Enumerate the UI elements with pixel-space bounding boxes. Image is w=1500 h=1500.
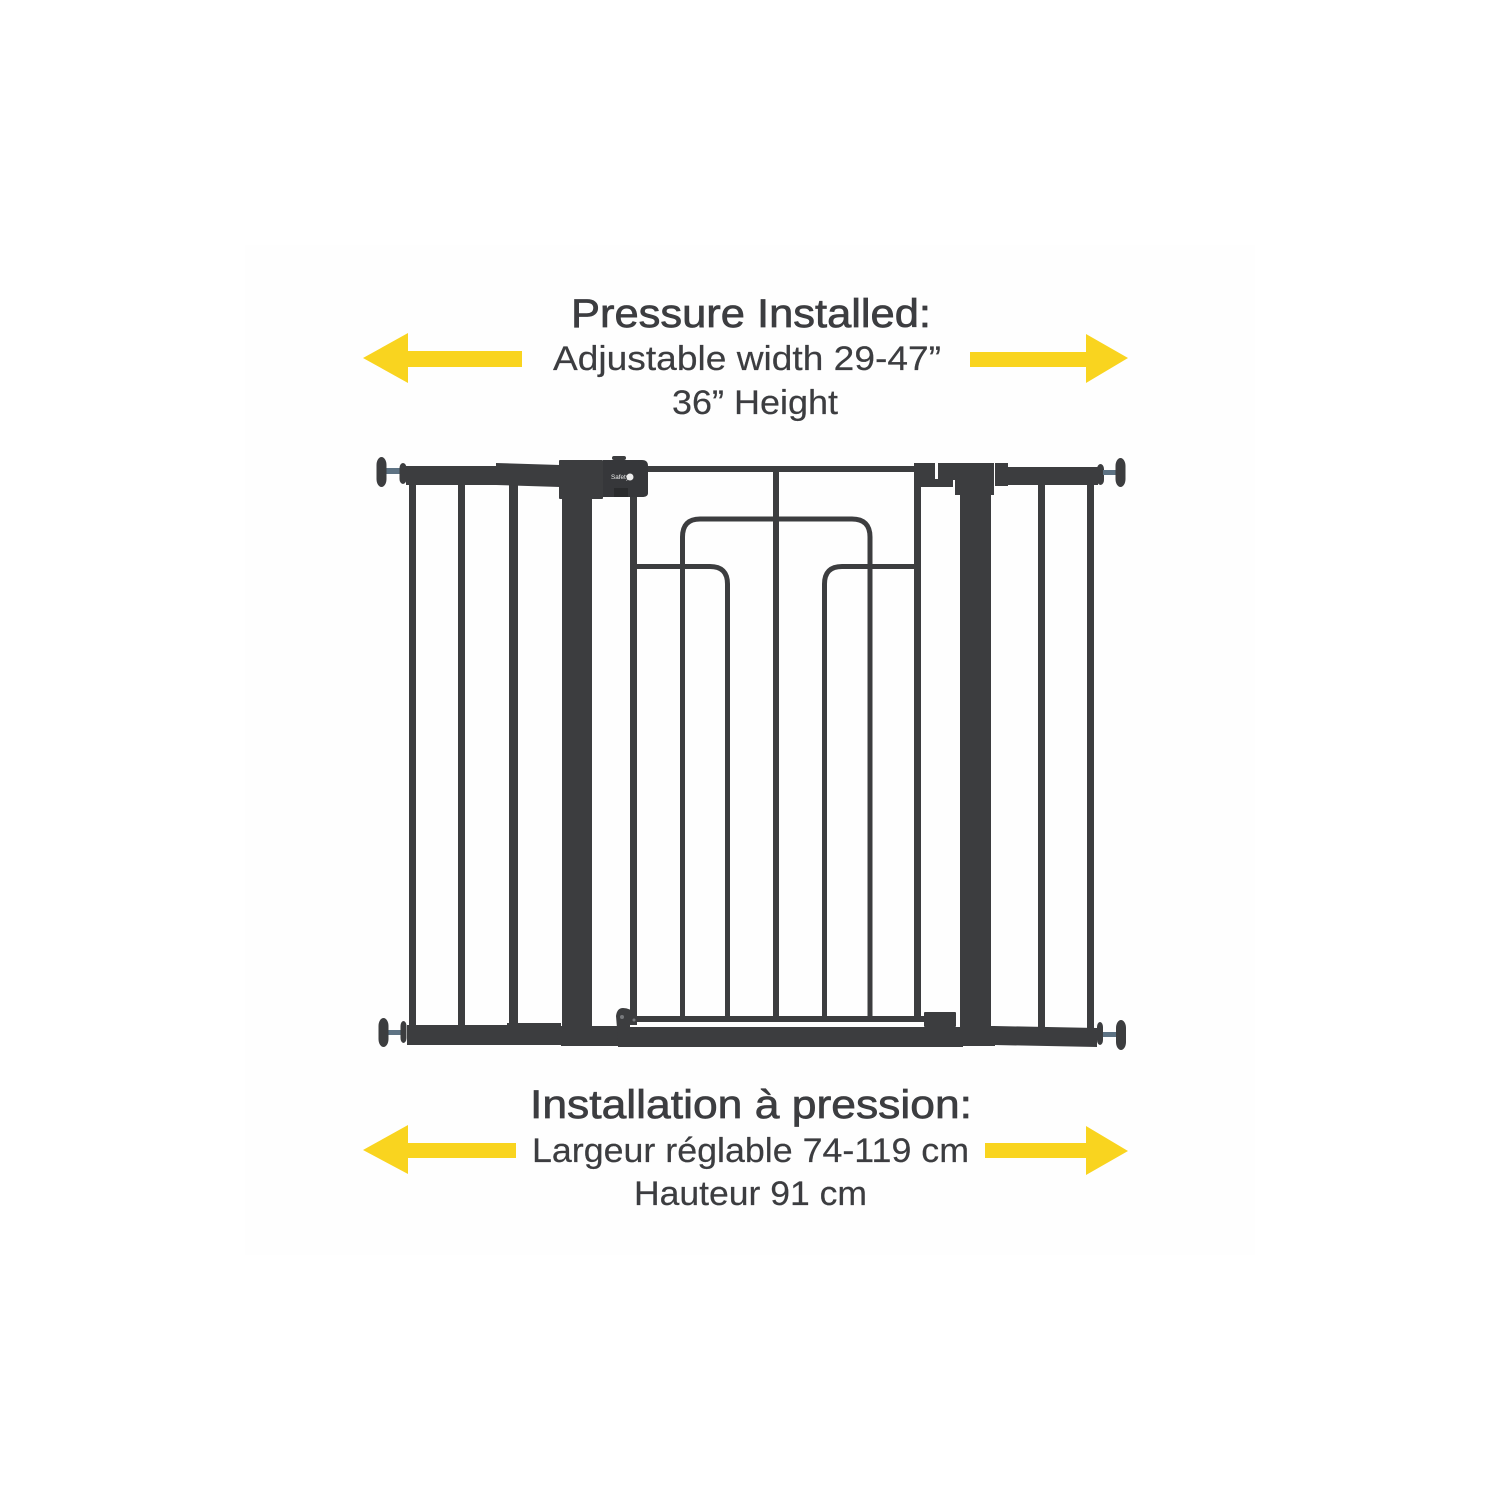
heading: Installation à pression: Installation à pression: xyxy=(530,1083,972,1127)
English dimensions block xyxy=(363,292,1128,422)
text: height: 36” Height xyxy=(672,384,839,422)
arrow: bottom right xyxy=(985,1126,1128,1175)
text: largeur: Largeur réglable 74-119 cm xyxy=(532,1132,969,1170)
door frame and inner bars xyxy=(630,466,927,1025)
door hinge and threshold xyxy=(616,1008,963,1047)
left extension bars xyxy=(409,484,518,1026)
right extension bars xyxy=(1038,484,1094,1028)
lock housing with logo: Safety xyxy=(611,474,630,481)
lock housing with logo xyxy=(603,456,648,497)
heading: Pressure Installed: Pressure Installed: xyxy=(571,292,931,336)
arrow: top right xyxy=(970,334,1128,383)
left post xyxy=(562,495,592,1030)
bottom left rail xyxy=(378,1018,621,1047)
arrow: bottom left xyxy=(363,1125,516,1174)
French dimensions block xyxy=(363,1083,1128,1213)
right post xyxy=(960,490,991,1030)
bottom right rail xyxy=(960,1020,1126,1050)
top left rail xyxy=(376,457,603,499)
gate illustration xyxy=(376,456,1126,1050)
arrow: top left xyxy=(363,333,522,383)
text: hauteur: Hauteur 91 cm xyxy=(634,1175,867,1213)
text: adjustable width: Adjustable width 29-47” xyxy=(553,340,941,378)
top right rail xyxy=(914,458,1126,495)
